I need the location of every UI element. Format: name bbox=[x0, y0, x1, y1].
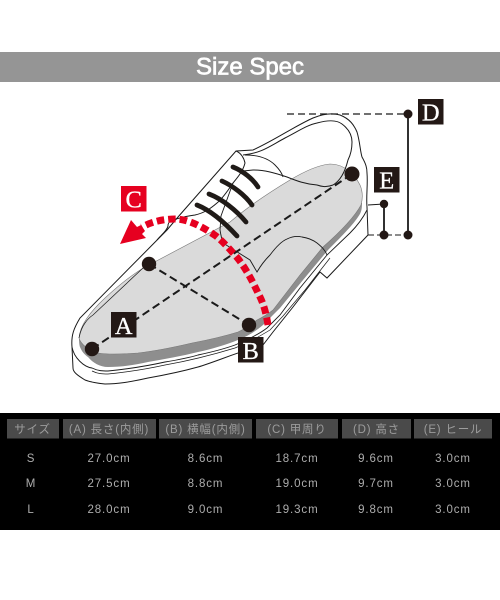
title bar: Size Spec bbox=[196, 54, 304, 80]
table header: (D) 高さ bbox=[353, 423, 400, 436]
collar line bbox=[243, 121, 352, 187]
row S: 3.0cm bbox=[435, 453, 471, 465]
row L: 9.8cm bbox=[358, 504, 394, 516]
measure D: height bracket bbox=[287, 110, 412, 240]
label A bbox=[111, 312, 136, 340]
row L bbox=[27, 504, 471, 516]
row S: 9.6cm bbox=[358, 453, 394, 465]
row S: 18.7cm bbox=[275, 453, 319, 465]
shoe laces bbox=[197, 167, 258, 236]
row M: 8.8cm bbox=[188, 478, 223, 490]
row S: S bbox=[27, 453, 35, 465]
row S bbox=[27, 453, 471, 465]
row S: 27.0cm bbox=[87, 453, 131, 465]
label C: C bbox=[126, 186, 142, 214]
tongue lines bbox=[245, 155, 283, 177]
table header: サイズ bbox=[14, 422, 51, 436]
row L: 9.0cm bbox=[188, 504, 223, 516]
row M: 27.5cm bbox=[87, 478, 131, 490]
row S: 8.6cm bbox=[188, 453, 223, 465]
table header: (B) 横幅(内側) bbox=[165, 422, 246, 436]
measure C: red arc with arrow bbox=[120, 219, 268, 325]
row M: 9.7cm bbox=[358, 478, 394, 490]
size table bbox=[0, 413, 500, 530]
row L: 3.0cm bbox=[435, 504, 471, 516]
label E: E bbox=[379, 168, 394, 194]
row M: 3.0cm bbox=[435, 478, 471, 490]
row M: 19.0cm bbox=[275, 478, 319, 490]
measure A: length line bbox=[85, 166, 360, 356]
shoe illustration bbox=[72, 114, 368, 384]
label D: D bbox=[422, 100, 440, 126]
row L: 28.0cm bbox=[87, 504, 131, 516]
measure B: width line bbox=[142, 257, 256, 332]
label A: A bbox=[115, 313, 133, 340]
row M bbox=[26, 478, 471, 490]
row L: 19.3cm bbox=[275, 504, 319, 516]
table header: (E) ヒール bbox=[424, 423, 482, 436]
label C bbox=[121, 186, 146, 214]
label E bbox=[374, 167, 400, 194]
shoe outer outline bbox=[72, 114, 368, 384]
label D bbox=[418, 99, 444, 126]
table header: (A) 長さ(内側) bbox=[69, 422, 149, 436]
label B: B bbox=[243, 338, 259, 365]
sole edge band bbox=[79, 200, 362, 367]
table header bbox=[7, 419, 492, 438]
row L: L bbox=[27, 504, 35, 516]
insole bbox=[79, 164, 362, 354]
row M: M bbox=[26, 478, 36, 490]
label B bbox=[238, 337, 264, 365]
welt lines bbox=[72, 210, 367, 371]
table header: (C) 甲周り bbox=[267, 423, 327, 436]
title bar bbox=[0, 52, 500, 82]
measure E: heel bracket bbox=[368, 200, 408, 240]
